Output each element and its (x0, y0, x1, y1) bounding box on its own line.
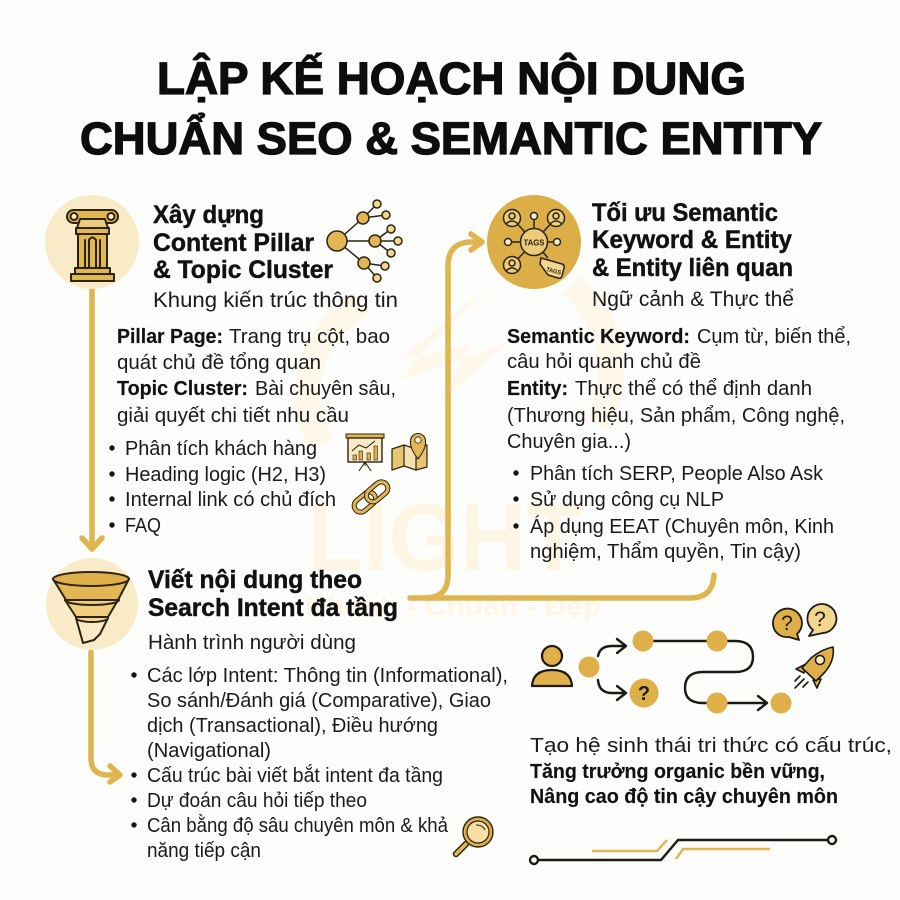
icon: tags network: TAGS (524, 238, 545, 248)
text: outcome statement: Tăng trưởng organic bền vững, (530, 760, 825, 783)
list: search intent tasks: Dự đoán câu hỏi tiếp theo (147, 789, 367, 812)
list: search intent tasks: Cấu trúc bài viết bắt intent đa tầng (147, 764, 443, 787)
list: pillar tasks: FAQ (125, 514, 161, 537)
text: pillar definitions: quát chủ đề tổng quan (117, 351, 321, 374)
icon: rocket (795, 647, 833, 688)
list: semantic tasks: Sử dụng công cụ NLP (530, 488, 724, 511)
text: pillar definitions: Pillar Page: (117, 325, 223, 348)
arrow: search intent to semantic entity (410, 234, 714, 598)
text: outcome statement: Tạo hệ sinh thái tri thức có cấu trúc, (530, 734, 892, 757)
text: semantic definitions: Chuyên gia...) (507, 430, 631, 453)
watermark: LIGHT logo: LIGHT (307, 484, 582, 591)
icon: question bubbles: ? (781, 612, 793, 635)
list: search intent tasks: dịch (Transactional), Điều hướng (147, 714, 438, 737)
text: pillar definitions: Bài chuyên sâu, (255, 377, 396, 400)
text: pillar definitions: giải quyết chi tiết nhu cầu (117, 404, 349, 427)
icon: pillar (45, 195, 139, 289)
panel: semantic keyword and entity (487, 195, 851, 563)
list: pillar tasks (109, 437, 336, 537)
list: search intent tasks: Cân bằng độ sâu chuyên môn & khả (147, 814, 449, 837)
text: semantic definitions: Thực thể có thể định danh (575, 377, 812, 400)
panel: search intent (46, 558, 508, 862)
text: semantic definitions: Cụm từ, biến thể, (697, 325, 851, 348)
icon: user journey flow (532, 630, 792, 714)
heading: search intent: Search Intent đa tầng (148, 594, 398, 622)
icon: circuit line (530, 836, 836, 864)
icon: person (532, 646, 572, 686)
list: search intent tasks: So sánh/Đánh giá (Comparative), Giao (147, 689, 491, 712)
heading: semantic keyword (592, 199, 793, 282)
text: pillar definitions: Trang trụ cột, bao (229, 325, 390, 348)
text: semantic definitions: Semantic Keyword: (507, 325, 690, 348)
heading: search intent: Viết nội dung theo (148, 566, 362, 594)
heading: content pillar: Content Pillar (153, 229, 314, 257)
list: search intent tasks (131, 664, 508, 862)
panel: outcome (530, 604, 892, 864)
icon: tags network: TAGS (546, 267, 562, 277)
text: semantic definitions: câu hỏi quanh chủ đề (507, 350, 701, 373)
journey nodes (578, 630, 792, 714)
subtitle: Ngữ cảnh & Thực thể (592, 287, 794, 311)
list: search intent tasks: năng tiếp cận (147, 839, 261, 862)
list: semantic tasks: Áp dụng EEAT (Chuyên môn, Kinh (530, 515, 834, 538)
watermark: LIGHT logo: Nhanh - Chuẩn - Đẹp (305, 593, 601, 621)
heading: content pillar (153, 201, 333, 284)
text: outcome statement (530, 734, 892, 808)
icon: question bubbles: ? (814, 608, 826, 631)
list: search intent tasks: Các lớp Intent: Thông tin (Informational), (147, 664, 508, 687)
arrow: pillar to search intent (82, 290, 102, 549)
panel: content pillar (45, 195, 427, 537)
heading: semantic keyword: Tối ưu Semantic (592, 199, 778, 227)
list: pillar tasks: Heading logic (H2, H3) (125, 463, 326, 486)
icon: magnifying glass (456, 817, 493, 854)
icon: map pin (392, 434, 427, 470)
icon: funnel (46, 558, 138, 650)
text: pillar definitions: Topic Cluster: (117, 377, 248, 400)
arrow: search intent to structure bullet (91, 652, 120, 782)
icon: user journey flow: ? (638, 683, 650, 705)
heading: content pillar: Xây dựng (153, 201, 264, 229)
heading: search intent (148, 566, 398, 622)
icon: presentation board (346, 434, 384, 471)
heading: semantic keyword: Keyword & Entity (592, 226, 792, 254)
list: pillar tasks: Phân tích khách hàng (125, 437, 317, 460)
icon: chain link (352, 479, 390, 515)
icon: topic cluster network (327, 200, 402, 282)
list: semantic tasks (513, 462, 834, 563)
list: search intent tasks: (Navigational) (147, 739, 271, 762)
watermark: LIGHT logo (305, 280, 611, 621)
journey path (598, 639, 767, 710)
heading: content pillar: & Topic Cluster (153, 256, 333, 284)
text: semantic definitions: (Thương hiệu, Sản phẩm, Công nghệ, (507, 404, 845, 427)
title: LẬP KẾ HOẠCH NỘI DUNG (157, 53, 746, 104)
icon: question bubbles (773, 604, 836, 640)
text: semantic definitions (507, 325, 851, 453)
title (80, 53, 822, 164)
subtitle: Khung kiến trúc thông tin (153, 288, 398, 312)
list: pillar tasks: Internal link có chủ đích (125, 488, 336, 511)
icon: tags network (487, 195, 581, 289)
list: semantic tasks: nghiệm, Thẩm quyền, Tin cậy) (530, 540, 801, 563)
heading: semantic keyword: & Entity liên quan (592, 254, 793, 282)
text: pillar definitions (117, 325, 396, 427)
text: semantic definitions: Entity: (507, 377, 568, 400)
title: CHUẨN SEO & SEMANTIC ENTITY (80, 113, 822, 164)
list: semantic tasks: Phân tích SERP, People Also Ask (530, 462, 824, 485)
text: outcome statement: Nâng cao độ tin cậy chuyên môn (530, 785, 838, 808)
subtitle: Hành trình người dùng (148, 631, 356, 654)
